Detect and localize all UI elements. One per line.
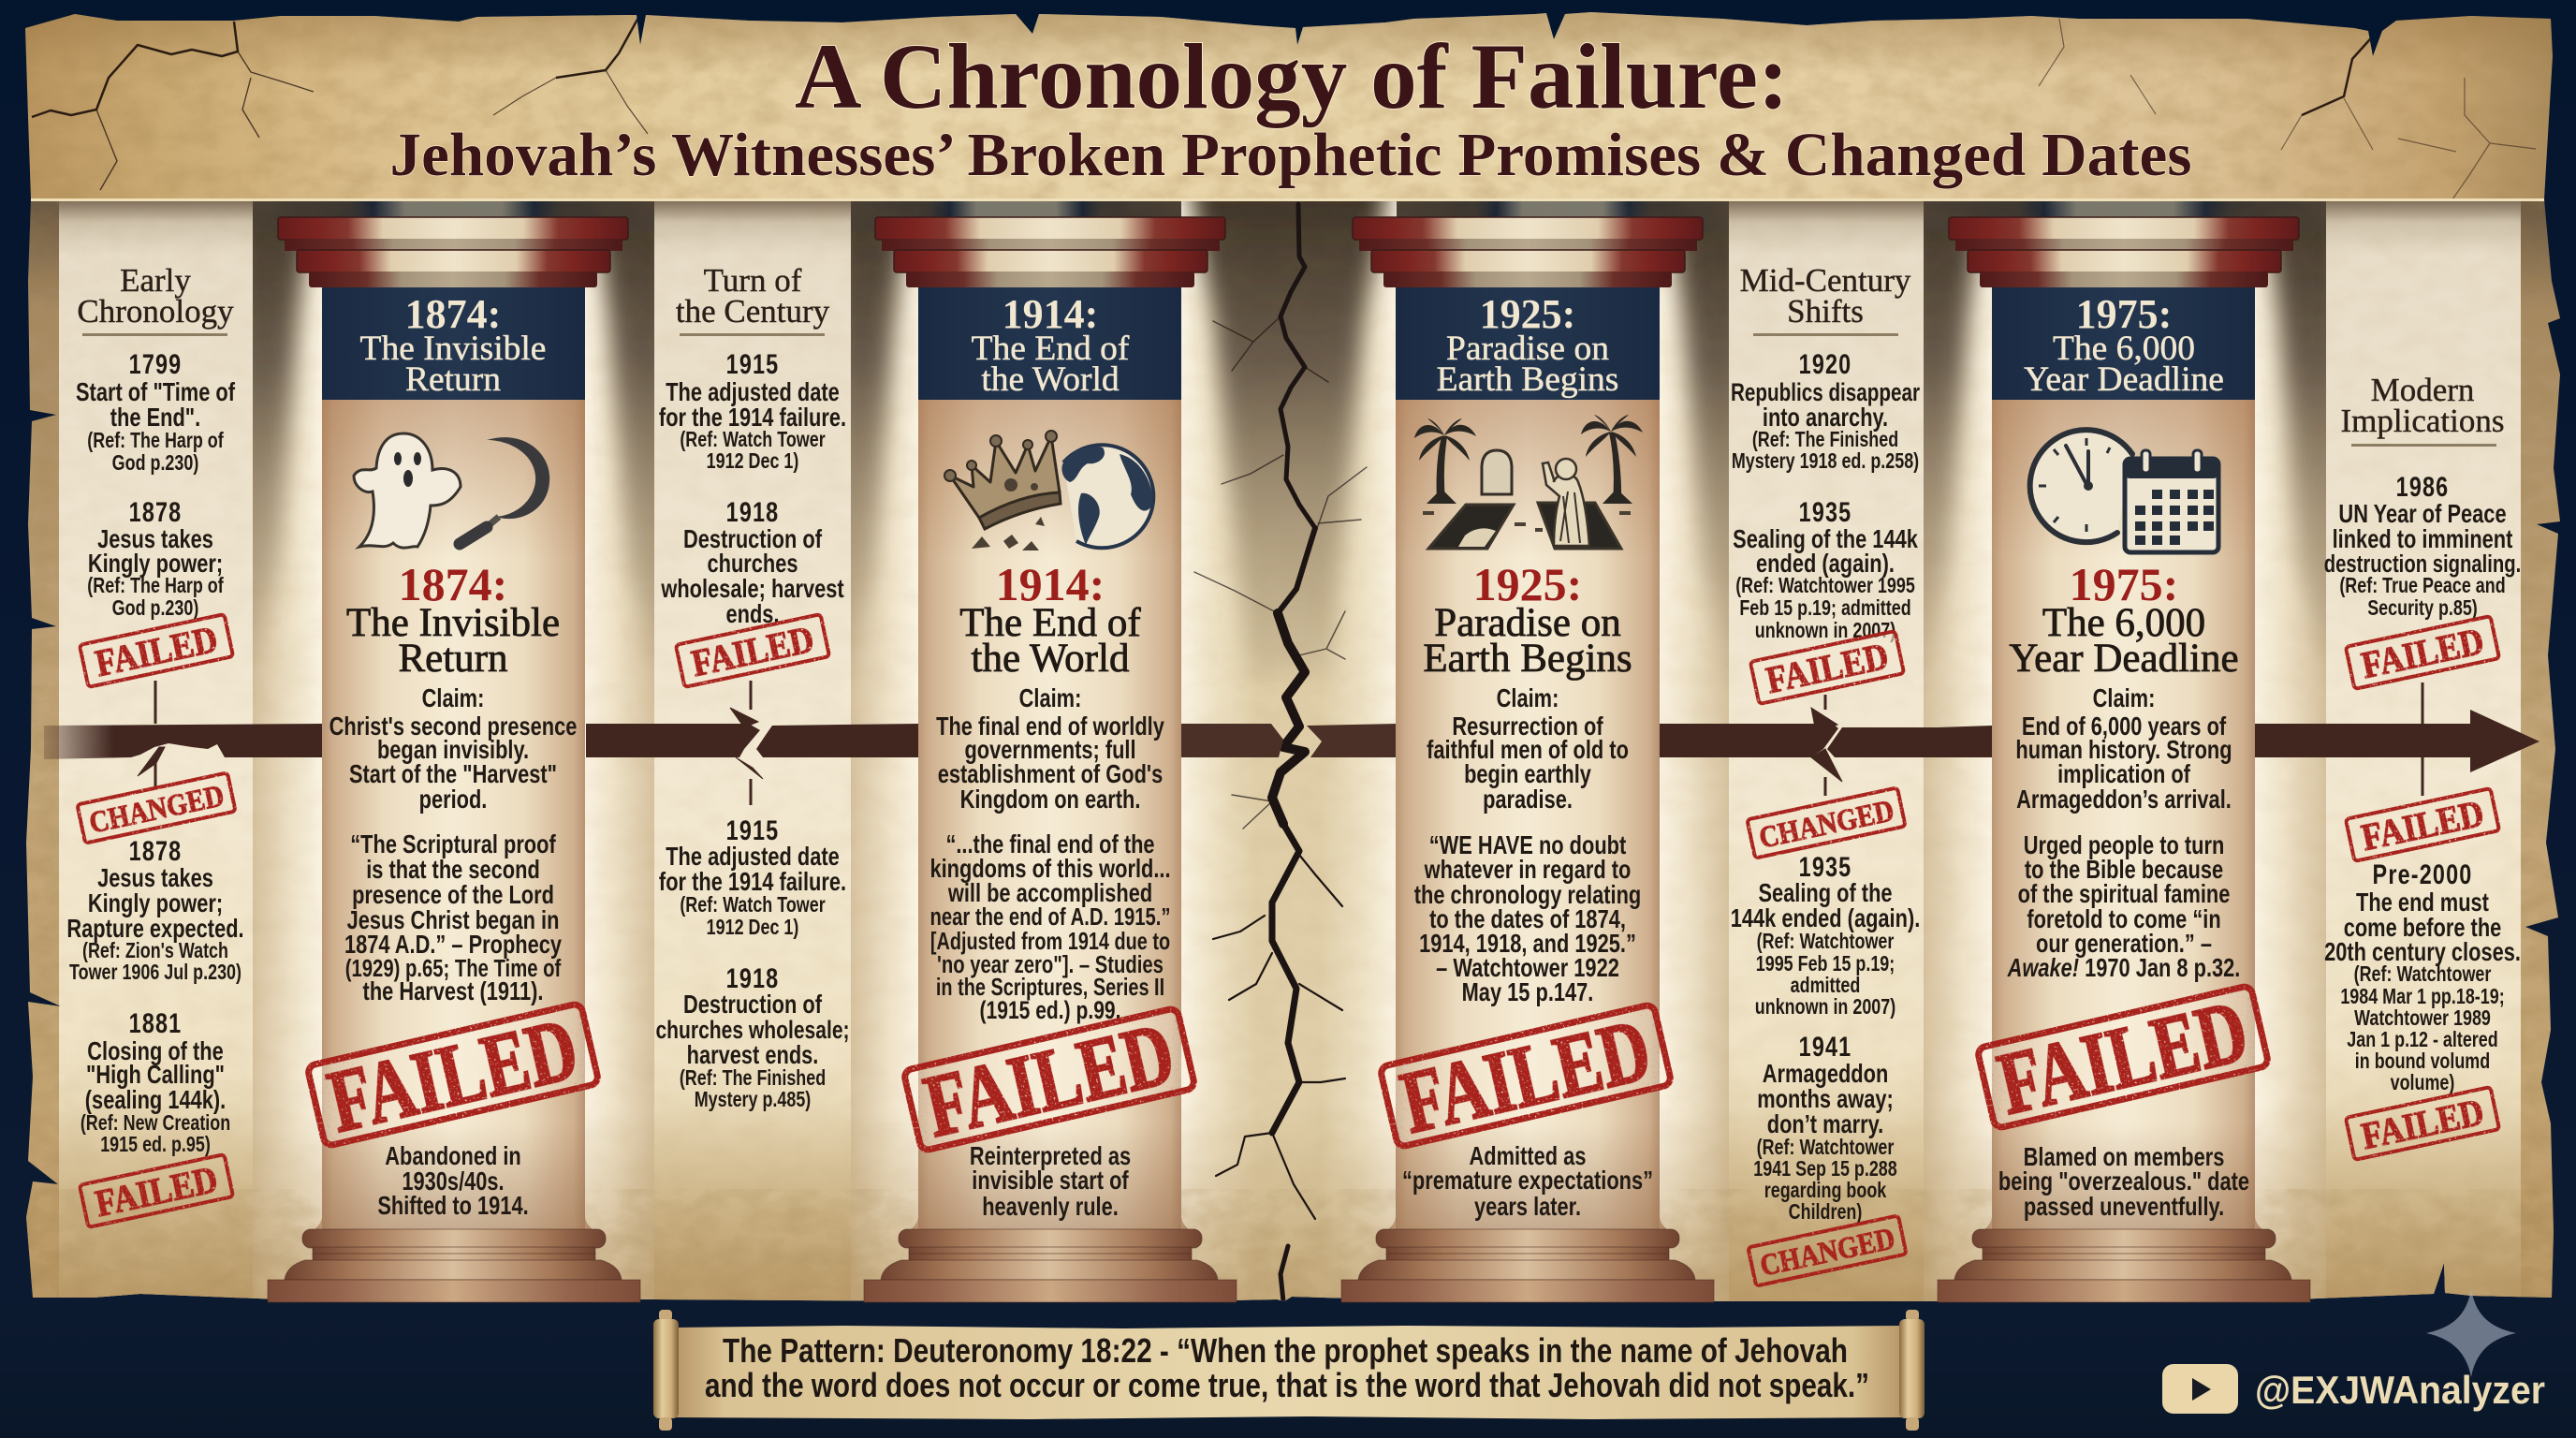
entries below timeline: Closing of the <box>87 1036 224 1066</box>
entries above timeline <box>1731 348 1920 643</box>
outcome text: invisible start of <box>972 1166 1129 1196</box>
entries above timeline <box>76 348 236 621</box>
heading: 1925 paradise: Earth Begins <box>1423 637 1632 681</box>
open grave right <box>1538 503 1621 549</box>
claim and quote text: Christ's second presence <box>329 712 577 741</box>
claim and quote text: whatever in regard to <box>1424 855 1631 885</box>
heading: 1925 paradise: Paradise on <box>1434 601 1621 645</box>
claim and quote text: begin earthly <box>1464 759 1591 789</box>
stamp: failed large: FAILED <box>1990 982 2256 1134</box>
claim and quote text: Claim: <box>422 683 484 713</box>
entries above timeline: Sealing of the 144k <box>1733 524 1918 554</box>
claim and quote text <box>329 683 577 1006</box>
panel: mid-century shifts <box>1731 262 1920 1286</box>
base <box>268 1229 640 1302</box>
entries above timeline: God p.230) <box>112 451 198 476</box>
entries above timeline: Security p.85) <box>2367 596 2478 621</box>
claim and quote text: 1914, 1918, and 1925.” <box>1419 929 1636 959</box>
stamp: failed large: FAILED <box>320 1000 586 1152</box>
claim and quote text: to the dates of 1874, <box>1429 904 1626 934</box>
outcome text: heavenly rule. <box>982 1192 1119 1222</box>
heading: 1914 end of the world: The End of <box>959 601 1141 645</box>
entries above timeline: linked to imminent <box>2333 524 2513 554</box>
entries below timeline: The adjusted date <box>666 842 840 872</box>
stamp: failed: FAILED <box>1763 635 1892 701</box>
entries below timeline <box>66 835 244 1157</box>
entries below timeline: 1912 Dec 1) <box>707 916 798 940</box>
entries below timeline: 1881 <box>129 1007 182 1039</box>
claim and quote text: Claim: <box>1019 683 1081 713</box>
footer scroll <box>653 1310 1925 1431</box>
claim and quote text: will be accomplished <box>947 878 1152 908</box>
title: A Chronology of Failure: <box>795 24 1789 128</box>
open grave left <box>1428 505 1514 549</box>
right roller <box>1899 1310 1925 1431</box>
entries above timeline: 1878 <box>129 496 182 528</box>
scroll paper <box>676 1326 1902 1419</box>
header band: Return <box>405 360 501 399</box>
claim and quote text: End of 6,000 years of <box>2022 712 2227 741</box>
segment: central break <box>1181 724 1397 757</box>
header band <box>1992 287 2255 400</box>
entries below timeline: 1915 ed. p.95) <box>100 1133 211 1157</box>
entries above timeline: (Ref: True Peace and <box>2339 574 2506 598</box>
entries above timeline: 1915 <box>726 348 779 380</box>
capital <box>1353 217 1703 287</box>
header band <box>918 287 1181 400</box>
header band: Year Deadline <box>2024 360 2224 399</box>
claim and quote text: of the spiritual famine <box>2018 879 2230 909</box>
base <box>1341 1229 1714 1302</box>
heading: 1975 deadline: Year Deadline <box>2009 637 2239 681</box>
capital <box>875 217 1225 287</box>
claim and quote text: our generation.” – <box>2036 929 2212 959</box>
outcome text: 1930s/40s. <box>402 1167 505 1196</box>
entries below timeline: Pre-2000 <box>2373 858 2472 890</box>
entries above timeline: The adjusted date <box>666 377 840 407</box>
icon: resurrection scene <box>1414 415 1643 549</box>
claim and quote text: Claim: <box>2093 683 2155 713</box>
entries above timeline: Kingly power; <box>88 549 223 579</box>
stamp: failed: FAILED <box>92 1158 221 1225</box>
entries below timeline: Mystery p.485) <box>695 1088 811 1112</box>
outcome text: Abandoned in <box>385 1141 521 1171</box>
header band: Paradise on <box>1446 330 1609 368</box>
entries below timeline: come before the <box>2344 913 2501 943</box>
claim and quote text: governments; full <box>964 735 1136 765</box>
palm right <box>1581 415 1643 504</box>
entries below timeline: for the 1914 failure. <box>659 867 846 897</box>
heading: 1975 deadline <box>2009 558 2239 681</box>
heading: 1874 invisible return <box>346 558 560 681</box>
entries below timeline: 1941 Sep 15 p.288 <box>1753 1157 1897 1181</box>
header band: The Invisible <box>360 330 546 368</box>
claim and quote text: Awake! 1970 Jan 8 p.32. <box>2007 953 2240 983</box>
header band: 1925: <box>1480 291 1575 337</box>
claim and quote text: establishment of God's <box>938 759 1163 789</box>
base <box>1938 1229 2310 1302</box>
outcome text <box>1998 1142 2249 1222</box>
entries below timeline: Children) <box>1789 1200 1862 1225</box>
scattered soil <box>1423 513 1631 530</box>
entries below timeline: Destruction of <box>683 990 823 1020</box>
risen figure <box>1543 459 1589 546</box>
entries below timeline: in bound volumd <box>2355 1049 2490 1074</box>
heading: turn of the century: Turn of <box>704 262 802 299</box>
header band: 1914: <box>1003 291 1098 337</box>
heading: mid-century shifts: Mid-Century <box>1740 262 1911 299</box>
entries above timeline: (Ref: The Harp of <box>87 574 224 598</box>
claim and quote text: Resurrection of <box>1452 712 1603 741</box>
entries below timeline: 1918 <box>726 962 779 994</box>
stamp: changed: CHANGED <box>86 779 227 841</box>
tombstone <box>1482 450 1512 494</box>
claim and quote text <box>929 683 1171 1025</box>
claim and quote text: “...the final end of the <box>945 829 1155 859</box>
entries above timeline: (Ref: The Finished <box>1752 428 1898 452</box>
stamp: failed: FAILED <box>2358 620 2487 686</box>
subtitle: Jehovah’s Witnesses’ Broken Prophetic Promises & Changed Dates <box>389 121 2192 189</box>
icon: calendar <box>2125 450 2218 552</box>
claim and quote text: – Watchtower 1922 <box>1436 953 1619 983</box>
heading: 1874 invisible return: Return <box>398 637 508 681</box>
entries above timeline: the End". <box>110 403 200 433</box>
entries above timeline: destruction signaling. <box>2324 550 2521 578</box>
claim and quote text <box>2007 683 2240 983</box>
entries below timeline: (Ref: Zion's Watch <box>82 939 228 963</box>
segment: left start <box>44 724 322 759</box>
heading: mid-century shifts <box>1740 262 1911 336</box>
entries above timeline: into anarchy. <box>1763 403 1888 433</box>
timeline arrow <box>44 681 2539 805</box>
entries above timeline: (Ref: Watchtower 1995 <box>1735 574 1915 598</box>
entries above timeline: for the 1914 failure. <box>659 403 846 433</box>
claim and quote text: “The Scriptural proof <box>350 829 556 859</box>
entries above timeline <box>659 348 846 629</box>
entries above timeline: 1920 <box>1799 348 1852 380</box>
heading: 1914 end of the world <box>959 558 1141 681</box>
header band <box>1396 287 1660 400</box>
entries below timeline: (Ref: New Creation <box>80 1111 230 1136</box>
header divider highlight <box>19 198 2565 201</box>
top shadows in gaps <box>234 178 2345 758</box>
entries below timeline <box>655 814 850 1112</box>
entries below timeline: 20th century closes. <box>2324 937 2521 967</box>
paper texture: header <box>101 15 2445 198</box>
pattern quotation: and the word does not occur or come true, that is the word that Jehovah did not speak.” <box>705 1366 1869 1404</box>
claim and quote text: near the end of A.D. 1915.” <box>929 903 1171 931</box>
entries above timeline: (Ref: Watch Tower <box>680 428 826 452</box>
outcome text: Shifted to 1914. <box>377 1191 529 1221</box>
entries above timeline: ended (again). <box>1756 549 1895 579</box>
claim and quote text: “WE HAVE no doubt <box>1429 830 1627 860</box>
header band: The End of <box>972 330 1130 368</box>
claim and quote text: (1929) p.65; The Time of <box>345 955 561 982</box>
heading: modern implications <box>2341 372 2504 447</box>
panel: pillar 1914 <box>864 217 1237 1302</box>
outcome text: being "overzealous." date <box>1998 1167 2249 1196</box>
entries below timeline: (sealing 144k). <box>85 1085 226 1115</box>
outcome text: years later. <box>1474 1192 1581 1222</box>
heading: 1975 deadline: 1975: <box>2070 558 2178 610</box>
entries below timeline: harvest ends. <box>687 1040 818 1070</box>
outcome text <box>377 1141 529 1221</box>
heading: 1874 invisible return: 1874: <box>399 558 507 610</box>
header band: the World <box>981 360 1120 399</box>
heading: early chronology: Early <box>120 262 191 299</box>
shaft <box>910 400 1190 1230</box>
icon: ghost <box>354 433 461 548</box>
entries below timeline: volume) <box>2391 1071 2454 1095</box>
claim and quote text: 1874 A.D.” – Prophecy <box>344 930 562 960</box>
claim and quote text: 'no year zero"]. – Studies <box>937 951 1164 978</box>
lower parchment base <box>19 200 2565 1305</box>
heading: early chronology <box>77 262 234 336</box>
torn fragments and stems <box>138 681 2422 805</box>
claim and quote text: in the Scriptures, Series II <box>936 974 1164 1001</box>
claim and quote text: began invisibly. <box>377 735 529 765</box>
entries above timeline: (Ref: The Harp of <box>87 429 224 453</box>
header band <box>322 287 585 400</box>
panel: early chronology <box>66 262 244 1227</box>
entries below timeline: "High Calling" <box>86 1060 225 1090</box>
entries below timeline: 1995 Feb 15 p.19; <box>1756 952 1895 976</box>
gaps between columns <box>253 200 2326 1305</box>
icon: clock <box>2030 430 2132 542</box>
dark band above capitals <box>253 200 2326 232</box>
entries above timeline: 1799 <box>129 348 182 380</box>
claim and quote text: The final end of worldly <box>936 712 1164 741</box>
shaft <box>314 400 593 1230</box>
stamp: failed large: FAILED <box>916 1005 1182 1156</box>
entries below timeline: (Ref: Watch Tower <box>680 893 826 917</box>
stamp: failed: FAILED <box>92 618 221 684</box>
outcome text <box>1402 1141 1653 1222</box>
central crack <box>1194 204 1367 1301</box>
claim and quote text: paradise. <box>1483 785 1573 814</box>
entries above timeline: Republics disappear <box>1731 379 1920 407</box>
claim and quote text: Claim: <box>1497 683 1559 713</box>
outcome text: “premature expectations” <box>1402 1166 1653 1196</box>
entries above timeline: churches <box>707 549 798 579</box>
heading: mid-century shifts: Shifts <box>1787 293 1864 330</box>
stamp: changed: CHANGED <box>1757 1222 1898 1284</box>
lower warm shading <box>19 1105 2565 1303</box>
outcome text: Blamed on members <box>2024 1142 2224 1172</box>
entries below timeline: Kingly power; <box>88 888 223 918</box>
claim and quote text: faithful men of old to <box>1427 735 1629 765</box>
claim and quote text: (1915 ed.) p.99. <box>980 997 1120 1025</box>
panel: modern implications <box>2324 372 2521 1160</box>
claim and quote text: Jesus Christ began in <box>347 905 559 935</box>
icon: crown <box>944 431 1061 550</box>
claim and quote text: implication of <box>2057 759 2190 789</box>
panel: pillar 1925 <box>1341 217 1714 1302</box>
entries below timeline: don’t marry. <box>1767 1109 1883 1139</box>
pattern quotation: The Pattern: Deuteronomy 18:22 - “When the prophet speaks in the name of Jehovah <box>723 1331 1848 1370</box>
icon: youtube <box>2162 1364 2238 1414</box>
segment: broken section 2 <box>586 724 918 757</box>
claim and quote text: Kingdom on earth. <box>960 785 1140 814</box>
segment: broken section 3 <box>1659 724 1992 757</box>
entries below timeline: 1941 <box>1799 1031 1852 1063</box>
entries below timeline: 1878 <box>129 835 182 867</box>
claim and quote text: the chronology relating <box>1414 880 1641 910</box>
shaft <box>1387 400 1668 1230</box>
heading: 1925 paradise <box>1423 558 1632 681</box>
outcome text: Reinterpreted as <box>970 1141 1131 1171</box>
claim and quote text: period. <box>419 785 487 814</box>
claim and quote text: Start of the "Harvest" <box>349 759 557 789</box>
segment: arrow head <box>2255 710 2539 772</box>
heading: turn of the century <box>676 262 830 336</box>
entries above timeline: ends. <box>725 599 780 629</box>
outcome text: passed uneventfully. <box>2024 1192 2224 1222</box>
icon: sickle <box>460 437 549 544</box>
claim and quote text: the Harvest (1911). <box>363 976 543 1006</box>
claim and quote text: [Adjusted from 1914 due to <box>930 928 1170 955</box>
entries above timeline: God p.230) <box>112 596 198 621</box>
entries below timeline <box>2324 858 2521 1095</box>
base <box>864 1229 1237 1302</box>
entries below timeline: churches wholesale; <box>655 1017 850 1045</box>
entries below timeline: Rapture expected. <box>66 914 244 944</box>
entries above timeline: Mystery 1918 ed. p.258) <box>1732 449 1919 474</box>
stamp: failed large: FAILED <box>1393 1001 1659 1152</box>
header parchment <box>19 9 2565 200</box>
entries below timeline: 1984 Mar 1 pp.18-19; <box>2340 985 2505 1009</box>
stamp: failed: FAILED <box>688 618 817 684</box>
entries below timeline <box>1731 851 1920 1225</box>
outcome text: Admitted as <box>1470 1141 1586 1171</box>
pattern quotation <box>705 1331 1869 1404</box>
entries below timeline: (Ref: Watchtower <box>1757 930 1894 954</box>
claim and quote text: foretold to come “in <box>2027 904 2221 934</box>
claim and quote text: to the Bible because <box>2025 855 2223 885</box>
heading: 1874 invisible return: The Invisible <box>346 601 560 645</box>
shaft <box>1983 400 2263 1230</box>
heading: early chronology: Chronology <box>77 293 234 330</box>
entries above timeline: Feb 15 p.19; admitted <box>1739 596 1911 621</box>
entries above timeline: 1912 Dec 1) <box>707 449 798 474</box>
entries below timeline: Watchtower 1989 <box>2354 1006 2491 1031</box>
claim and quote text: May 15 p.147. <box>1462 977 1593 1007</box>
entries above timeline: UN Year of Peace <box>2338 499 2507 529</box>
entries below timeline: 1915 <box>726 814 779 846</box>
entries below timeline: Tower 1906 Jul p.230) <box>69 961 242 985</box>
entries below timeline: (Ref: The Finished <box>680 1066 826 1091</box>
entries above timeline: wholesale; harvest <box>660 574 844 604</box>
heading: 1914 end of the world: the World <box>972 637 1129 681</box>
heading: turn of the century: the Century <box>676 293 830 330</box>
entries above timeline <box>2324 471 2521 621</box>
heading: modern implications: Implications <box>2341 403 2504 439</box>
panel: pillar 1975 <box>1938 217 2310 1302</box>
header band: Earth Begins <box>1437 360 1618 399</box>
entries below timeline: (Ref: Watchtower <box>2354 962 2491 987</box>
side panels <box>59 200 2521 1301</box>
entries below timeline: admitted <box>1791 974 1860 998</box>
heading: 1925 paradise: 1925: <box>1473 558 1582 610</box>
entries below timeline: (Ref: Watchtower <box>1757 1136 1894 1160</box>
heading: 1975 deadline: The 6,000 <box>2042 601 2205 645</box>
capital <box>1949 217 2299 287</box>
entries below timeline: unknown in 2007) <box>1755 995 1895 1020</box>
claim and quote text: kingdoms of this world... <box>929 854 1171 884</box>
claim and quote text: human history. Strong <box>2015 735 2232 765</box>
claim and quote text <box>1414 683 1641 1007</box>
entries above timeline: 1935 <box>1799 496 1852 528</box>
capital <box>278 217 628 287</box>
claim and quote text: is that the second <box>366 855 540 885</box>
entries below timeline: Jesus takes <box>97 863 213 893</box>
icon: globe <box>1061 445 1153 548</box>
stamp: failed: FAILED <box>2358 1091 2487 1157</box>
panel: turn of the century <box>655 262 850 1112</box>
header band: The 6,000 <box>2053 330 2195 368</box>
header cracks <box>32 16 2536 199</box>
entries below timeline: Jan 1 p.12 - altered <box>2347 1028 2498 1052</box>
entries above timeline: 1986 <box>2396 471 2449 503</box>
entries above timeline: unknown in 2007) <box>1755 619 1895 643</box>
entries below timeline: Sealing of the <box>1758 878 1893 908</box>
heading: 1914 end of the world: 1914: <box>996 558 1105 610</box>
panel: pillar 1874 <box>268 217 640 1302</box>
channel handle: @EXJWAnalyzer <box>2255 1368 2545 1412</box>
outcome text <box>970 1141 1131 1222</box>
icon: sparkle watermark <box>2426 1289 2516 1377</box>
claim and quote text: Armageddon’s arrival. <box>2016 785 2232 814</box>
left roller <box>653 1310 679 1431</box>
entries below timeline: regarding book <box>1764 1179 1887 1203</box>
stamp: changed: CHANGED <box>1756 794 1897 856</box>
entries below timeline: 144k ended (again). <box>1731 903 1920 933</box>
entries above timeline: Destruction of <box>683 524 823 554</box>
entries above timeline: Jesus takes <box>97 524 213 554</box>
header band: 1975: <box>2076 291 2172 337</box>
claim and quote text: presence of the Lord <box>352 880 554 910</box>
entries above timeline: 1918 <box>726 496 779 528</box>
palm left <box>1414 418 1476 504</box>
paper texture: lower body <box>19 200 2565 1305</box>
stamp: failed: FAILED <box>2358 792 2487 858</box>
claim and quote text: Urged people to turn <box>2024 830 2224 860</box>
entries above timeline: Start of "Time of <box>76 377 236 407</box>
entries below timeline: Armageddon <box>1763 1059 1888 1089</box>
entries below timeline: The end must <box>2356 888 2489 917</box>
entries below timeline: 1935 <box>1799 851 1852 883</box>
header band: 1874: <box>405 291 501 337</box>
entries below timeline: months away; <box>1757 1084 1894 1114</box>
heading: modern implications: Modern <box>2371 372 2474 408</box>
